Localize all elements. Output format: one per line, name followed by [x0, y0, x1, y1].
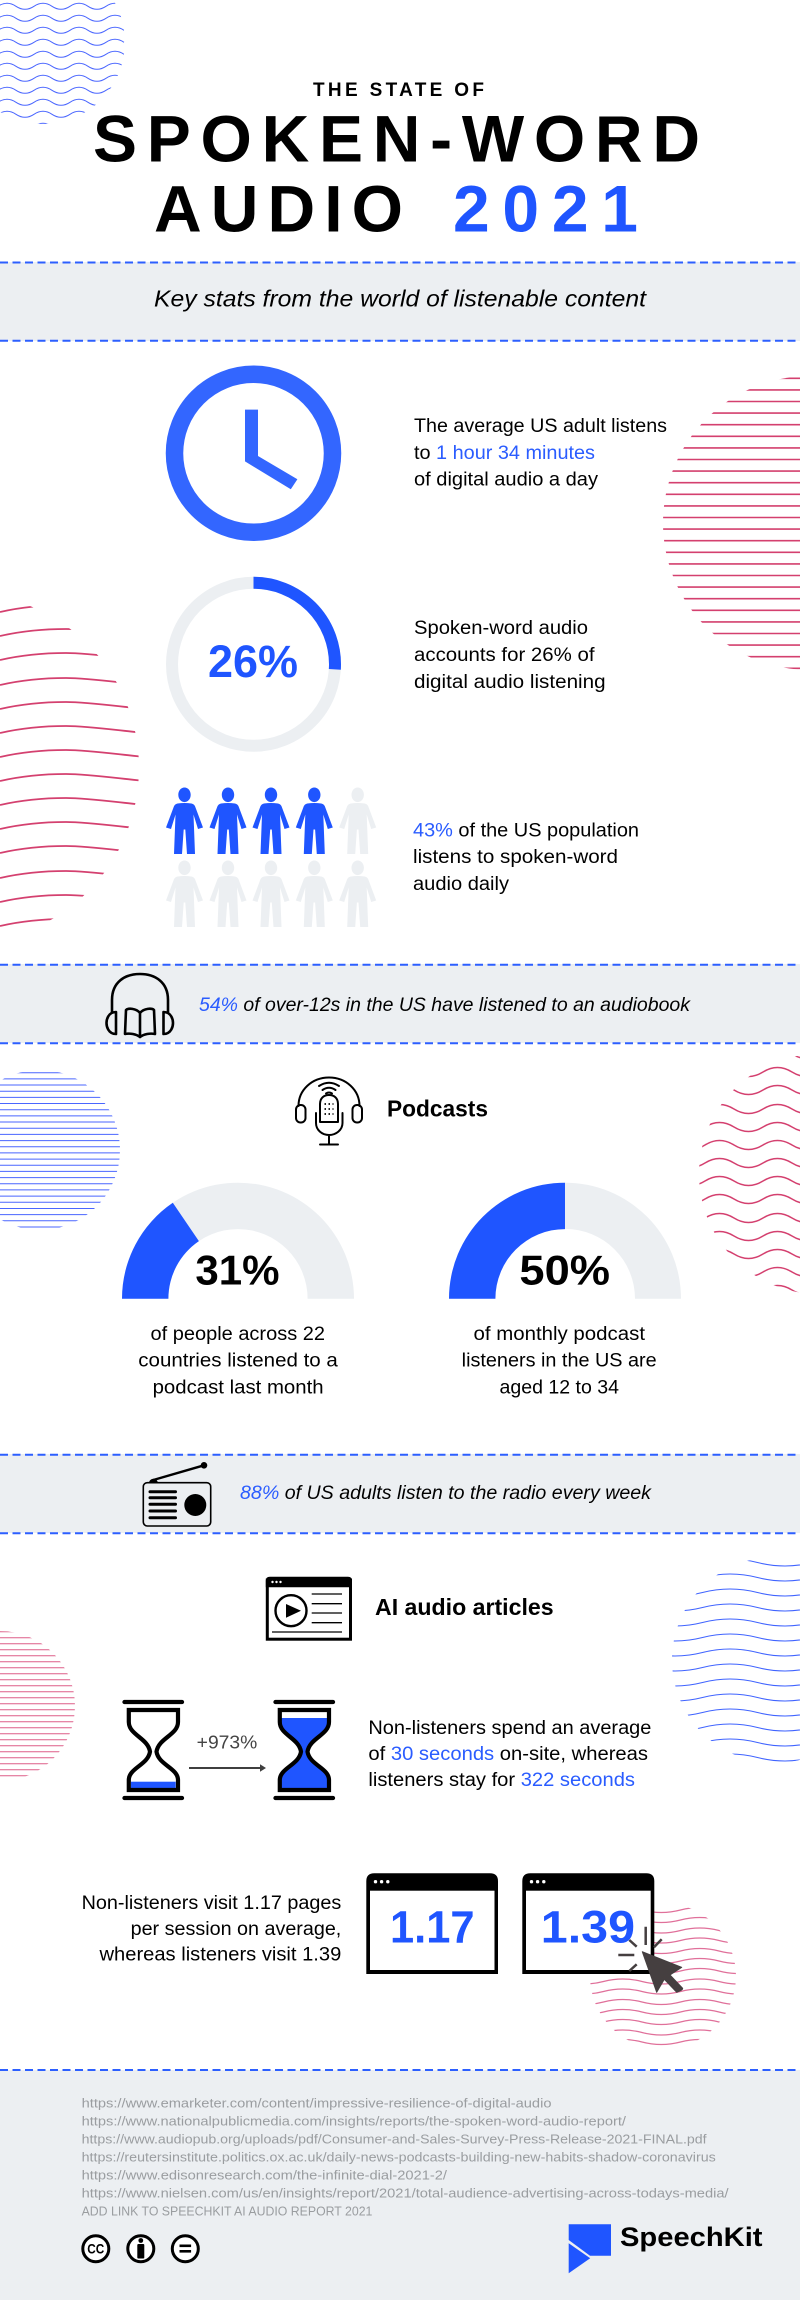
icon: headphones with book: [106, 974, 173, 1037]
decoration: left blue striped circle: [0, 1072, 125, 1232]
text: time on site: Non-listeners spend an average: [368, 1718, 651, 1739]
text: share of digital audio: Spoken-word audio: [414, 618, 588, 639]
caption: 50%: aged 12 to 34: [500, 1377, 619, 1398]
text: time on site: of 30 seconds on-site, whereas: [368, 1744, 648, 1765]
heading: AI audio articles: AI audio articles: [375, 1594, 554, 1620]
caption: 31%: [138, 1324, 338, 1398]
text: time on site: listeners stay for 322 seconds: [368, 1770, 635, 1791]
gauge chart: 50%: [449, 1183, 681, 1299]
caption: 31%: podcast last month: [153, 1377, 324, 1398]
caption: 31%: countries listened to a: [138, 1351, 338, 1372]
footer: source links: https://www.audiopub.org/uploads/pdf/Consumer-and-Sales-Survey-Press-Release-2021-FINAL.pdf: [82, 2132, 707, 2147]
decoration: right pink striped circle: [660, 378, 800, 670]
band: key stats subtitle: Key stats from the world of listenable content: [154, 286, 648, 312]
icon: creative commons licence: [83, 2236, 198, 2262]
decoration: right pink wave circle: [699, 1056, 800, 1292]
footer: source links: ADD LINK TO SPEECHKIT AI AUDIO REPORT 2021: [82, 2204, 372, 2219]
icon: cursor click: [618, 1927, 683, 1992]
heading: podcasts: Podcasts: [387, 1096, 488, 1122]
text: daily listening: [414, 416, 667, 491]
icon: audio article window: [266, 1577, 352, 1639]
band: audiobook stat: [0, 964, 800, 1043]
text: daily population share: listens to spoken-word: [413, 847, 618, 868]
text: pages per session: Non-listeners visit 1.17 pages: [82, 1893, 341, 1914]
gauge chart: 31%: 31%: [195, 1246, 280, 1293]
gauge chart: 50%: 50%: [519, 1246, 610, 1293]
icon: hourglass after: [276, 1702, 333, 1798]
text: share of digital audio: accounts for 26% of: [414, 645, 595, 666]
footer panel: [0, 2070, 800, 2300]
text: time on site: [368, 1718, 651, 1791]
band: radio stat: [0, 1454, 800, 1533]
icon: creative commons licence: CC: [87, 2242, 105, 2256]
title: [93, 80, 700, 246]
browser window: 1.39: [522, 1873, 654, 1974]
arrow: +973%: [189, 1732, 266, 1772]
decoration: right blue wave circle: [672, 1560, 800, 1762]
title: THE STATE OF: [313, 80, 484, 101]
text: daily population share: [413, 820, 639, 895]
decoration: pink wave circle behind cursor: [590, 1908, 736, 2046]
title: SPOKEN-WORD: [93, 102, 700, 176]
decoration: top-left blue wave circle: [0, 3, 124, 129]
footer: source links: https://www.edisonresearch.com/the-infinite-dial-2021-2/: [82, 2168, 447, 2183]
donut chart: 26%: [172, 583, 335, 746]
band: key stats subtitle: [0, 262, 800, 341]
icon: hourglass before: [124, 1702, 182, 1798]
text: daily population share: 43% of the US population: [413, 820, 639, 841]
text: pages per session: per session on average,: [131, 1919, 341, 1940]
footer: source links: https://www.nielsen.com/us/en/insights/report/2021/total-audience-advertising-across-todays-media/: [82, 2186, 729, 2201]
text: daily listening: to 1 hour 34 minutes: [414, 443, 595, 464]
browser window: 1.39: 1.39: [541, 1902, 635, 1953]
browser window: 1.17: 1.17: [390, 1902, 474, 1953]
icon: clock: [174, 374, 332, 532]
icon: podcast microphone with headphones: [296, 1078, 362, 1144]
band: audiobook stat: 54% of over-12s in the US have listened to an audiobook: [199, 995, 692, 1016]
footer: source links: https://reutersinstitute.politics.ox.ac.uk/daily-news-podcasts-building-new-habits-shadow-coronavirus: [82, 2150, 716, 2165]
logo: SpeechKit: [569, 2222, 762, 2273]
gauge chart: 31%: [122, 1183, 354, 1299]
text: daily population share: audio daily: [413, 874, 510, 895]
icon: radio: [143, 1462, 211, 1526]
text: daily listening: The average US adult listens: [414, 416, 667, 437]
band: radio stat: 88% of US adults listen to the radio every week: [240, 1483, 653, 1504]
decoration: left pink wave circle: [0, 605, 145, 926]
text: pages per session: whereas listeners visit 1.39: [98, 1945, 341, 1966]
pictogram: people 43%: [166, 788, 376, 927]
caption: 31%: of people across 22: [150, 1324, 325, 1345]
text: share of digital audio: digital audio listening: [414, 672, 606, 693]
donut chart: 26%: 26%: [208, 636, 298, 687]
footer: source links: https://www.nationalpublicmedia.com/insights/reports/the-spoken-word-audio-report/: [82, 2114, 626, 2129]
footer: source links: [82, 2096, 729, 2219]
caption: 50%: [462, 1324, 657, 1398]
text: pages per session: [82, 1893, 341, 1966]
footer: source links: https://www.emarketer.com/content/impressive-resilience-of-digital-audio: [82, 2096, 551, 2111]
decoration: left pink striped circle: [0, 1631, 75, 1776]
title: AUDIO: [154, 172, 403, 246]
text: share of digital audio: [414, 618, 606, 693]
caption: 50%: of monthly podcast: [474, 1324, 646, 1345]
caption: 50%: listeners in the US are: [462, 1351, 657, 1372]
text: daily listening: of digital audio a day: [414, 470, 599, 491]
arrow: +973%: +973%: [197, 1732, 257, 1752]
title: 2021: [453, 172, 638, 246]
browser window: 1.17: [366, 1873, 498, 1974]
logo: SpeechKit: SpeechKit: [620, 2222, 762, 2252]
